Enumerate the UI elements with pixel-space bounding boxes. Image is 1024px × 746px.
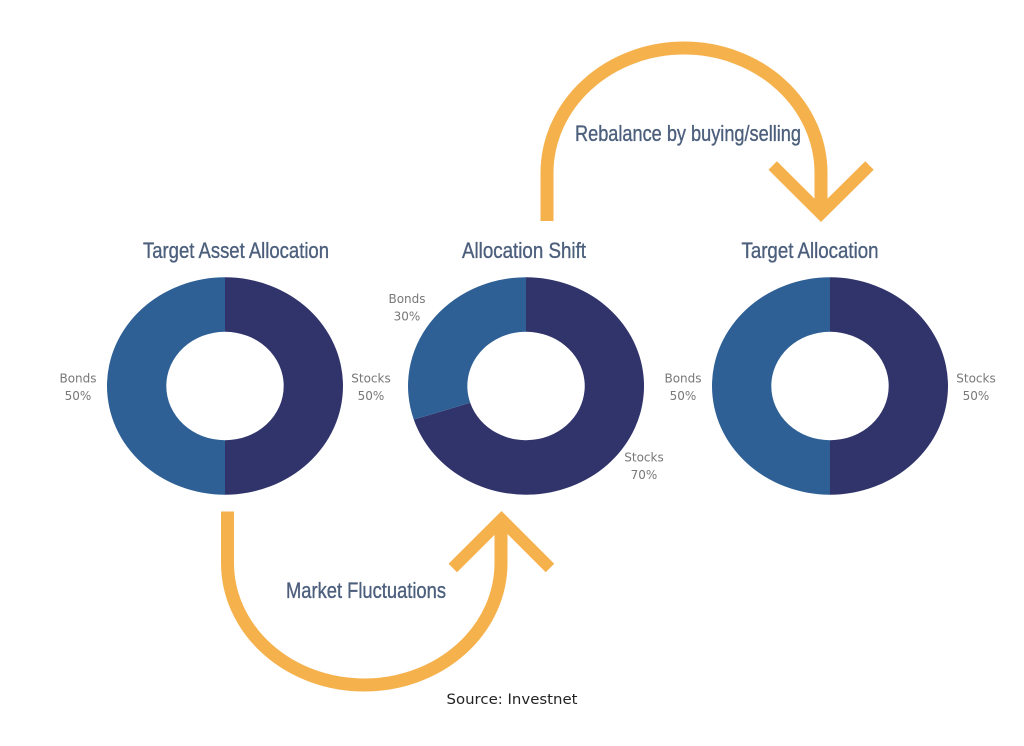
source: Source: Investnet	[446, 692, 578, 708]
label: bonds 50% left: Bonds	[59, 372, 97, 386]
donut chart: target allocation	[712, 277, 948, 495]
label: bonds 30%: 30%	[394, 310, 420, 324]
label: stocks 50% right: Stocks	[956, 372, 996, 386]
label: bonds 50% left: 50%	[65, 389, 91, 403]
label: bonds 30%: Bonds	[388, 292, 426, 306]
label: stocks 50% left: 50%	[358, 389, 384, 403]
label: stocks 50% left: Stocks	[351, 372, 391, 386]
heading: allocation shift: Allocation Shift	[462, 238, 586, 263]
heading: target asset allocation: Target Asset Allocation	[143, 238, 329, 263]
arrow: rebalance	[547, 48, 870, 221]
label: bonds 50% right: 50%	[670, 389, 696, 403]
donut chart: target asset allocation	[107, 277, 343, 495]
donut chart: allocation shift	[408, 277, 644, 495]
heading: target allocation: Target Allocation	[742, 238, 878, 263]
label: bonds 50% right: Bonds	[664, 372, 702, 386]
label: stocks 50% right: 50%	[963, 389, 989, 403]
arrow label: market fluctuations: Market Fluctuations	[286, 578, 446, 603]
arrow label: rebalance by buying/selling: Rebalance by buying/selling	[575, 121, 801, 146]
label: stocks 70%: 70%	[631, 468, 657, 482]
label: stocks 70%: Stocks	[624, 450, 664, 464]
arrow: market fluctuations	[228, 512, 550, 685]
